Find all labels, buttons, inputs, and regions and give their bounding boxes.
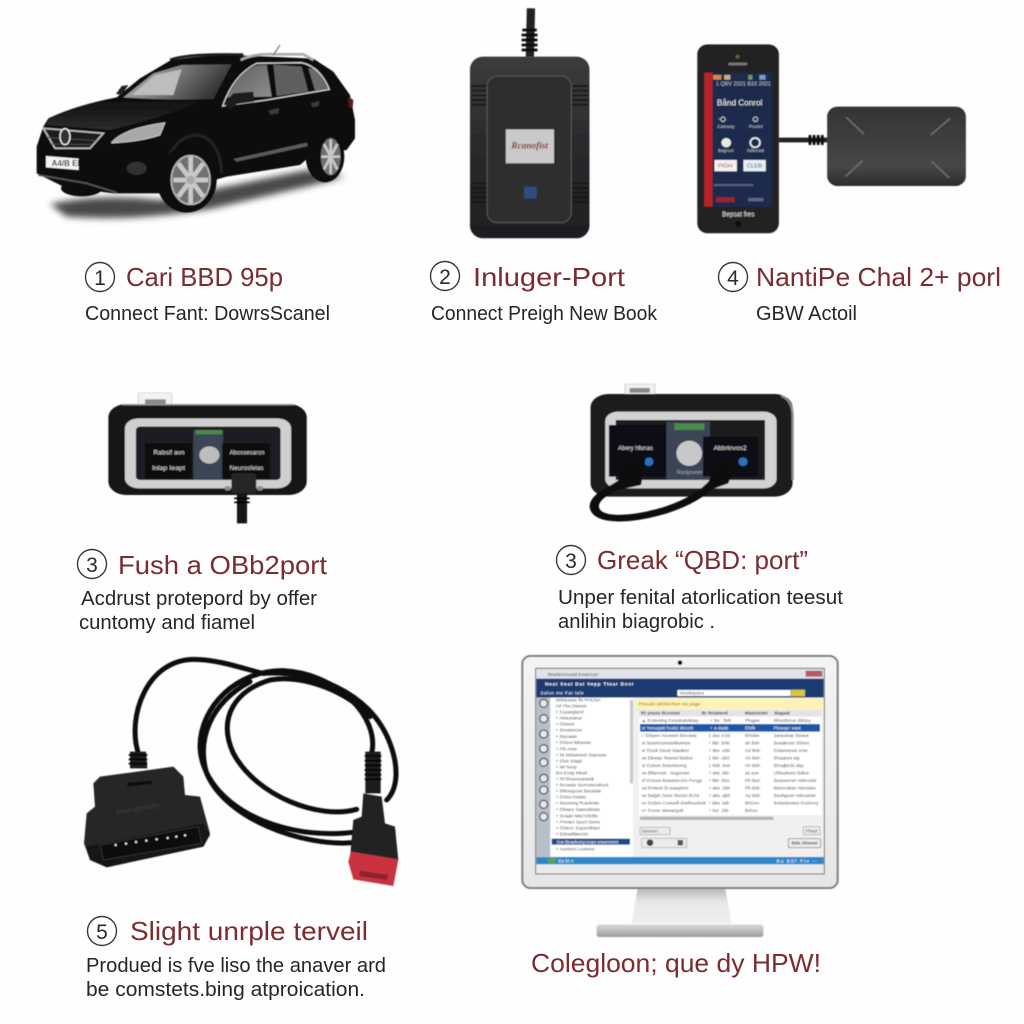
description [558, 587, 843, 633]
data table: + a daab [710, 726, 729, 731]
step 5 caption: 5 [96, 921, 108, 944]
data table: Beaooener Hdenostt [774, 778, 817, 783]
image: OBD port with single cable [108, 393, 307, 523]
data table: Pfugee [745, 718, 760, 723]
data table: Pb Bon [745, 778, 761, 783]
image: black SUV [37, 45, 355, 218]
file tree: + Ebie Siagit [556, 758, 583, 763]
rear wheel [306, 131, 344, 182]
data table [640, 711, 820, 813]
data table: Maaoisten [745, 711, 768, 716]
step 5 caption [86, 916, 386, 1001]
data table: Ah Bdn [745, 763, 761, 768]
heading: NantiPe Chal 2+ porl [756, 262, 1001, 292]
description [86, 955, 386, 1001]
data table: xt Elook Deod Stauktor [642, 748, 690, 753]
description: Connect Fant: DowrsScanel [85, 303, 330, 325]
monitor stand [597, 887, 763, 937]
data table: 1 hbb .bob [708, 763, 731, 768]
file tree: + Eldeoi lideasse [556, 740, 591, 745]
step 3 caption: right [556, 545, 843, 633]
data table: Estareanas onte [774, 748, 808, 753]
data table: Ehifk [745, 726, 756, 731]
file tree: + Snaart Mte7ofstfts [556, 813, 598, 818]
software window: Woelsoniouad Keaercyn [548, 672, 598, 677]
image: OBD port with single cable: Abosoesaron [230, 449, 264, 456]
image: OBD cable with red connector [84, 659, 398, 886]
file tree: + Plb Ame [556, 746, 577, 751]
file tree: + Rl Rlowoeantedt [556, 777, 595, 782]
step 4 caption: 4 [727, 267, 739, 290]
description: Connect Preigh New Book [431, 303, 658, 325]
image: desktop monitor with diagnostic software [522, 656, 838, 937]
heading: Cari BBD 95p [126, 262, 283, 292]
description: anlihin biagrobic . [558, 611, 715, 633]
software window: Pbeyt [806, 828, 818, 833]
data table: Ah Bdn [745, 756, 761, 761]
data table: + bhr .bbo [708, 778, 730, 783]
image: OBD port with looped cable [591, 384, 793, 518]
file tree: + Bdeadtlanoist [556, 831, 589, 836]
data table: Rt yoass Bcsoset [641, 711, 680, 716]
software window: Woekspace [680, 691, 705, 696]
data table: Bhoqbeds dap [774, 763, 804, 768]
data table: Ad Bdn [745, 748, 761, 753]
file tree: + Breasercie [556, 728, 582, 733]
label plate [506, 129, 554, 163]
file tree: + Aloiceseue [556, 716, 583, 721]
data table: + abs .1bb [708, 785, 731, 790]
step 3 caption: left [78, 550, 328, 634]
status button [524, 187, 537, 199]
description [79, 588, 317, 634]
description: Produed is fve liso the anaver ard [86, 955, 386, 977]
step 3 caption: right: 3 [565, 550, 577, 573]
description: be comstets.bing atproication. [86, 979, 365, 1001]
data table: Bhtdsn [745, 733, 760, 738]
data table: Br Boatwod [702, 711, 728, 716]
software window: Salon me Fat tele [540, 691, 584, 696]
data table: + dss .obb [708, 748, 730, 753]
monitor bezel [522, 656, 838, 888]
data table: ▲ Eoteeting Eesoitutiolstay [642, 718, 699, 723]
phone: Proviel [749, 124, 763, 129]
data table: xt Eutess Bosoiteeing [642, 763, 687, 768]
description: cuntomy and fiamel [79, 612, 255, 634]
file tree: + Auotrion Leasme [556, 847, 595, 852]
description: Unper fenital atorlication teesut [558, 587, 843, 609]
file tree: + Ebeunt [556, 722, 575, 727]
phone: 1 QBV 2021 B33 2021 [716, 81, 771, 87]
file tree: + Pheare Spurt Sivee [556, 819, 600, 824]
data table: Pb Bdn [745, 785, 761, 790]
data table: Bfoiotbnue dtibley [774, 718, 811, 723]
heading: Greak “QBD: port” [597, 545, 808, 575]
file tree: Soe Beapleong mope eneenment [557, 839, 619, 844]
software window: Ea Et # [558, 858, 574, 863]
data table: Bteonobas Hdodass [774, 785, 816, 790]
phone: Bagroot [718, 148, 734, 153]
phone [697, 44, 779, 233]
image: black OBD adapter box with cable [470, 8, 589, 238]
phone: ⛭ [752, 114, 758, 123]
image: OBD port with looped cable: Rsoljoveer [677, 470, 703, 476]
file tree: + Efdeoc Supsnithant [556, 825, 601, 830]
image: OBD port with single cable: Inlap Ieapt [152, 464, 186, 472]
file tree: Atf Fbe Diamer [556, 703, 587, 708]
data table: Zaraoinac Beaus [774, 733, 810, 738]
file tree: + Bflesopuse Baolade [556, 789, 602, 794]
data table: xe Balgin Duoc Becbe Bchd [642, 793, 700, 798]
data table: as aon [745, 770, 759, 775]
data table: + bbs .tab [708, 800, 729, 805]
file tree: + Nr Mdearteet Seposee [556, 752, 607, 757]
large connector [84, 752, 210, 867]
data table: xx Enden Cowoell doeftsoobott [642, 800, 707, 805]
file tree: + Baoming Roadvate [556, 801, 600, 806]
data table: + ohs .bbr [708, 770, 730, 775]
dongle [827, 107, 966, 186]
step 2 caption: 2 [439, 266, 451, 289]
file tree: + Mr hoop [556, 765, 577, 770]
label plate: Rcanofist [510, 141, 548, 151]
data table: + bbr .bbb [708, 741, 730, 746]
file tree: + Bvosste Seensteoshunt [556, 783, 609, 788]
data table: + abs .qbb [708, 793, 731, 798]
software window: Neat Seat Dat Vepp Ttear Dost [545, 682, 634, 687]
step 1 caption [85, 262, 330, 325]
data table: xe Bftanoon . Sugoreet [642, 770, 690, 775]
phone: CLEB [747, 164, 762, 170]
software window: Saooon.. [642, 829, 660, 834]
data table: Br0on [745, 808, 758, 813]
file tree: Bm Evep Mbeit [556, 771, 588, 776]
large connector: Pwerpcreoly [115, 800, 160, 817]
closing callout: Colegloon; que dy HPW! [531, 948, 821, 978]
file tree: + Baroase [556, 734, 577, 739]
file tree: Wrbleaner fbi PHUSA [556, 697, 602, 702]
data table: xf Entosa Boasneruhn Pvngp [642, 778, 702, 783]
data table: xa Emteat Si euaqitont [642, 785, 689, 790]
image: OBD port with single cable: Neurosfelas [230, 464, 264, 472]
phone: Sdlecast [747, 148, 765, 153]
front wheel [157, 135, 222, 213]
data table: Bagaat [774, 711, 790, 716]
file tree: + Eldsa insiste [556, 795, 586, 800]
data table: 1 dao 4.bb [708, 733, 731, 738]
data table: ah Bdn [745, 741, 760, 746]
red connector [348, 752, 398, 886]
heading: Fush a OBb2port [118, 550, 328, 580]
data table: Baohgoss Hdooanst [774, 793, 816, 798]
software window: Ba BDf Pte -- [777, 858, 817, 863]
data table: xt Yesoqatti fooit2 sbtoob [642, 726, 694, 731]
data table: Fbuuqu' eaot [774, 726, 801, 731]
image: OBD port with looped cable: Abbrinvos2 [714, 444, 747, 452]
step 4 caption [718, 262, 1001, 325]
software window: Bde Aheost [792, 841, 818, 846]
image: OBD port with single cable: Rabsif avn [153, 449, 185, 456]
image: OBD port with looped cable: Abery hfunas [618, 444, 653, 452]
description: Acdrust protepord by offer [81, 588, 317, 610]
data table: Bhaqnes stp [774, 756, 800, 761]
phone: PIGH [718, 164, 732, 170]
phone: Bepsat fres [722, 211, 755, 219]
data table: xe Eleeas Tesesd Bedos [642, 756, 693, 761]
data table: x+ Eotoe oteeaegob [642, 808, 684, 813]
heading: Slight unrple terveil [130, 916, 368, 946]
file tree [552, 697, 630, 852]
step 2 caption [430, 262, 658, 325]
data table: BhDon [745, 800, 760, 805]
heading: Inluger-Port [473, 262, 626, 292]
data table: Beadeoier Stbext [774, 741, 810, 746]
data table: 1 bbr .ob0 [708, 756, 730, 761]
phone: Bånd Conrol [717, 97, 762, 107]
file tree: + Equargland [556, 710, 584, 715]
step 3 caption: left: 3 [86, 554, 98, 577]
phone: Cateway [717, 124, 735, 129]
step 1 caption: 1 [94, 267, 106, 290]
image: black SUV: A4/B El [52, 159, 80, 168]
software window [536, 668, 824, 874]
data table: Botsnteoses Eodsnoy [774, 800, 819, 805]
data table: Uf0sa8ons Bdiox [774, 770, 810, 775]
data table: xt Seartmoiesteitluretse [642, 741, 691, 746]
file tree: + Efeaes Sasnokhate [556, 807, 600, 812]
image: smartphone linked to dongle [697, 44, 966, 233]
phone: ᐧ⛭ [718, 114, 726, 123]
description: GBW Actoil [756, 303, 857, 325]
software window: Phouds sBShi-Ren vis page [638, 701, 701, 707]
data table: Ap Bdn [745, 793, 761, 798]
data table: □ Elepen Asoneet Becotep [642, 733, 697, 738]
data table: + 6or .Stb [708, 808, 729, 813]
data table: + Be . fMb [710, 718, 732, 723]
